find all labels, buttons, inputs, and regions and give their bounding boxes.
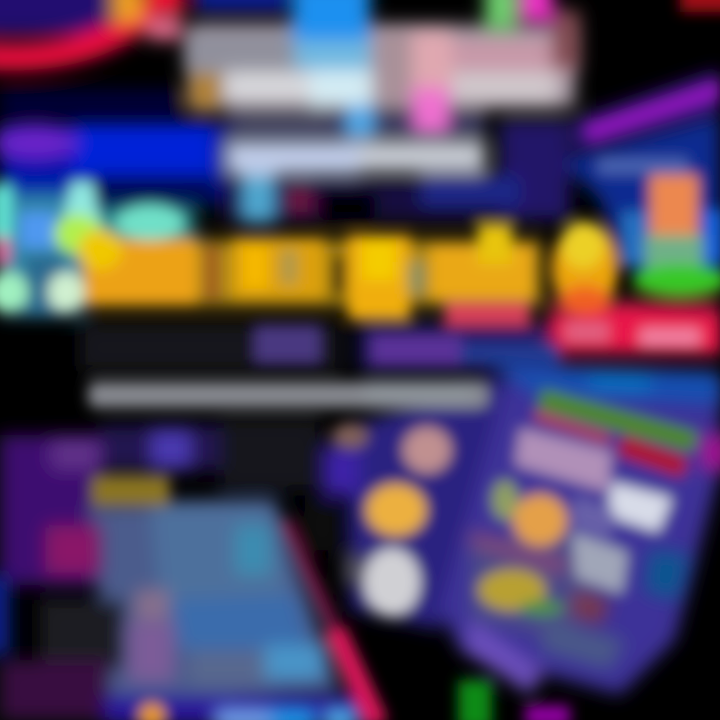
icon: yellow table header: [92, 476, 170, 506]
panel: blue band: [0, 125, 520, 223]
marker: table bottom yellow: [139, 703, 165, 720]
icon: green bottom mark: [458, 680, 492, 720]
icon: yellow egg: [552, 221, 618, 314]
panel: central column: [305, 385, 475, 585]
panel: dark divider band: [255, 302, 560, 365]
panel: top-left arc: [0, 0, 290, 115]
icon: pink coin: [403, 427, 451, 473]
panel: top centre banner: [185, 0, 580, 140]
chart: rainbow stripes: [535, 398, 695, 468]
panel: cyan letters at left: [0, 182, 184, 315]
panel: top-right stripes: [585, 0, 720, 174]
arrow: red diagonal table edge: [285, 520, 378, 720]
text block: grey subtitle: [88, 382, 488, 408]
marker: magenta bottom mark: [525, 705, 570, 720]
icon: white badge: [364, 548, 420, 616]
panel: rows on screen: [515, 428, 672, 594]
icon: small brown coin: [332, 423, 368, 449]
icon: yellow-green row badge: [478, 569, 564, 616]
panel: right perspective screen: [465, 365, 720, 695]
icon: right emblem: [550, 175, 720, 352]
icon: orange row badge: [492, 480, 567, 546]
heading: yellow title: [78, 224, 534, 320]
panel: bottom-left table: [0, 430, 355, 720]
icon: yellow coin: [366, 484, 426, 536]
